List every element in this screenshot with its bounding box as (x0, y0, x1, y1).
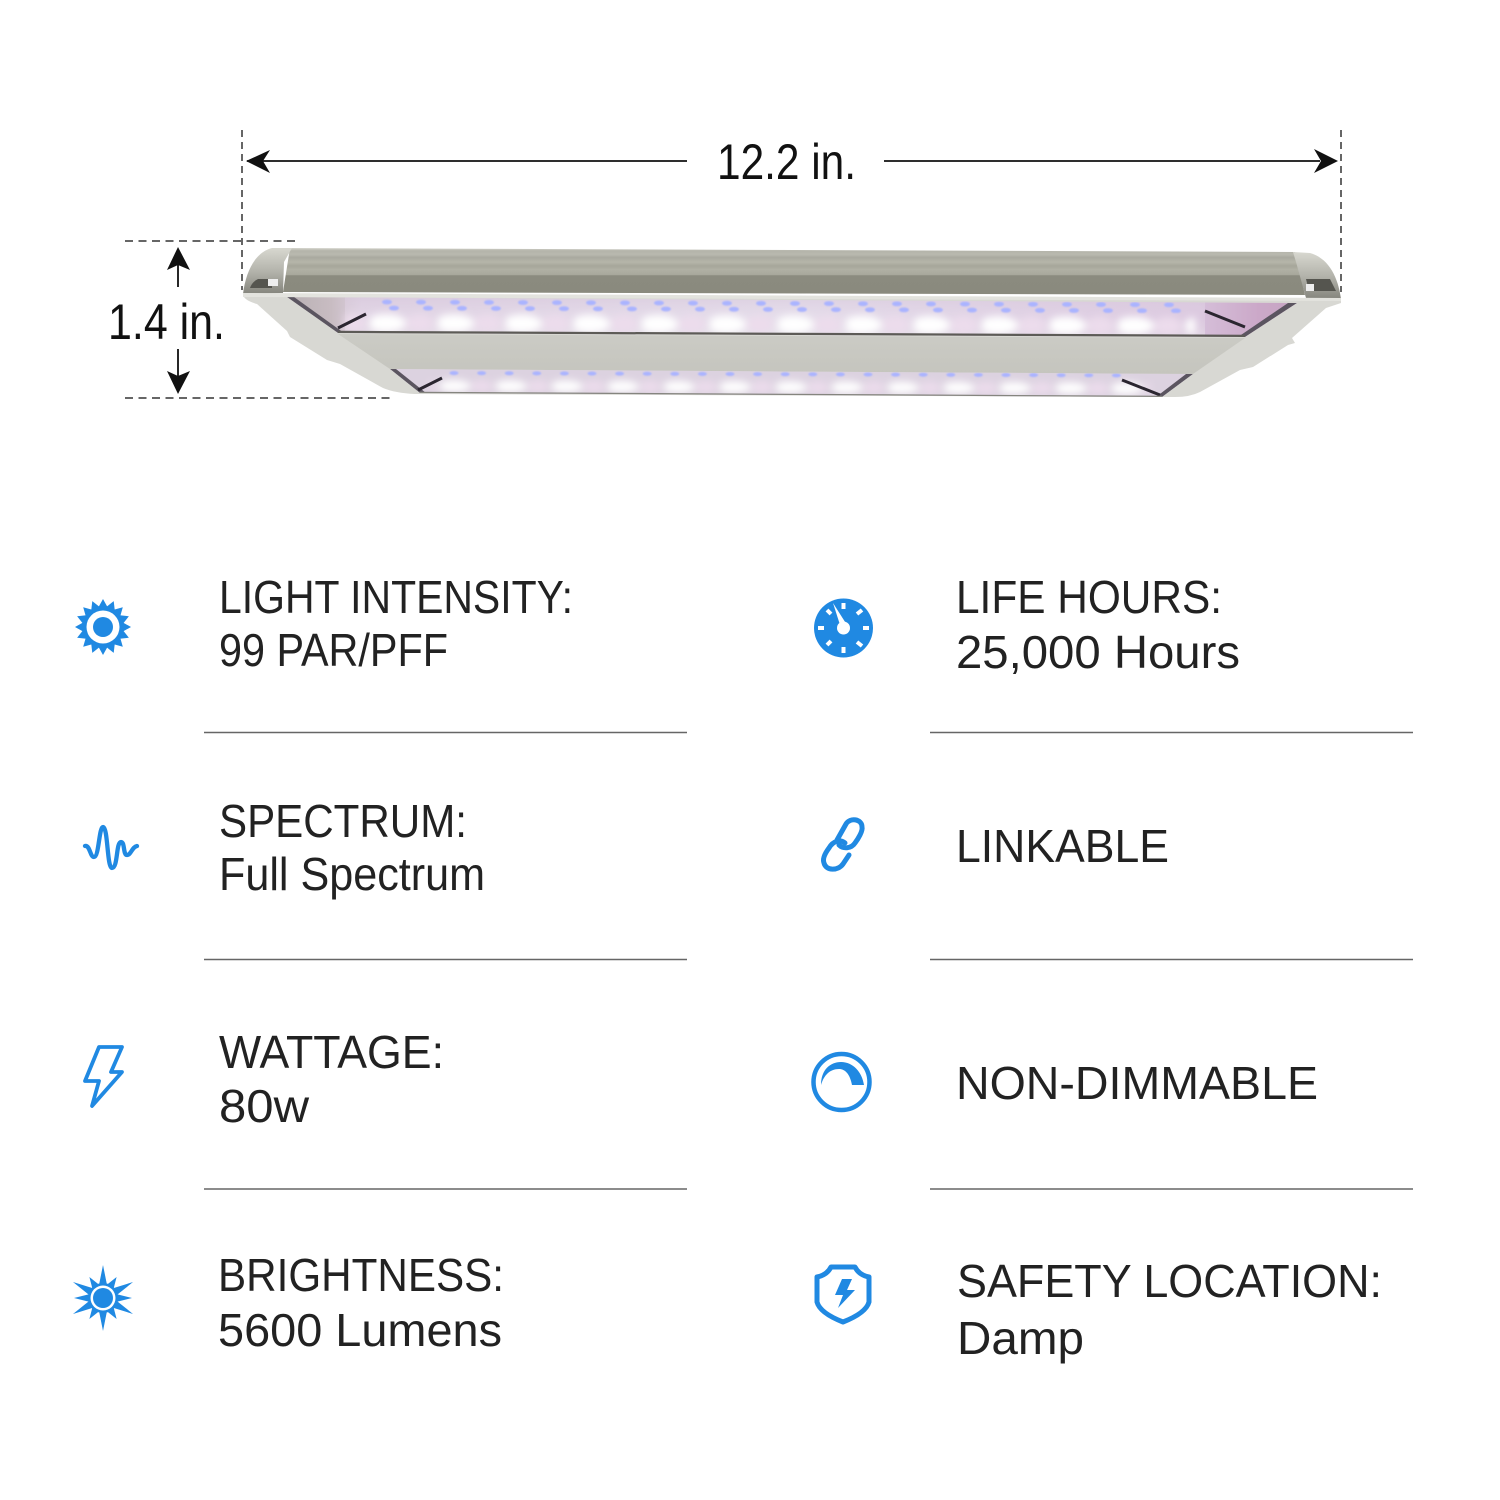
height dimension (108, 241, 392, 398)
spec: life hours (814, 571, 1240, 678)
text: safety location: SAFETY LOCATION: (957, 1255, 1382, 1307)
height label: 1.4 in. (108, 294, 225, 350)
text: life hours: 25,000 Hours (956, 626, 1240, 678)
text: spectrum: SPECTRUM: (219, 795, 467, 847)
width label: 12.2 in. (717, 134, 856, 190)
width dimension (242, 130, 1341, 292)
left end cap (243, 248, 292, 294)
icon: bright star sun (71, 1265, 135, 1331)
text: light intensity: LIGHT INTENSITY: (219, 571, 573, 623)
icon: gauge dial (814, 598, 873, 658)
spec: light intensity (75, 571, 573, 676)
icon: lightning bolt (85, 1047, 122, 1106)
text: brightness (218, 1249, 504, 1356)
cap ports (250, 279, 1336, 291)
housing top rail (283, 248, 1305, 295)
text: life hours (956, 571, 1240, 678)
bottom light panel (390, 369, 1193, 397)
text: brightness: BRIGHTNESS: (218, 1249, 504, 1301)
text: spectrum (219, 795, 485, 900)
text: wattage: WATTAGE: (219, 1026, 444, 1078)
spec: spectrum (85, 795, 485, 900)
right end cap (1293, 252, 1341, 299)
text: brightness: 5600 Lumens (218, 1304, 502, 1356)
fixture base (243, 294, 1341, 397)
text: non-dimmable: NON-DIMMABLE (956, 1057, 1318, 1109)
spec: brightness (71, 1249, 504, 1356)
spec: linkable (823, 820, 1169, 872)
housing lower lip (243, 293, 1341, 301)
text: light intensity (219, 571, 573, 676)
icon: shield with bolt (817, 1267, 869, 1322)
text: wattage (219, 1026, 444, 1132)
spec: safety location (817, 1255, 1382, 1364)
text: light intensity: 99 PAR/PFF (219, 624, 448, 676)
icon: sun gear (75, 599, 131, 655)
top light panel (287, 297, 1297, 337)
text: life hours: LIFE HOURS: (956, 571, 1222, 623)
icon: chain link (823, 820, 862, 869)
centre bar (338, 334, 1245, 374)
text: spectrum: Full Spectrum (219, 848, 485, 900)
grow light fixture (243, 248, 1341, 398)
text: wattage: 80w (219, 1080, 310, 1132)
icon: dial ring (814, 1054, 870, 1110)
spec: wattage (85, 1026, 444, 1132)
text: linkable: LINKABLE (956, 820, 1169, 872)
icon: wave (85, 827, 137, 868)
text: safety location: Damp (957, 1312, 1084, 1364)
spec: non-dimmable (814, 1054, 1318, 1110)
text: safety location (957, 1255, 1382, 1364)
